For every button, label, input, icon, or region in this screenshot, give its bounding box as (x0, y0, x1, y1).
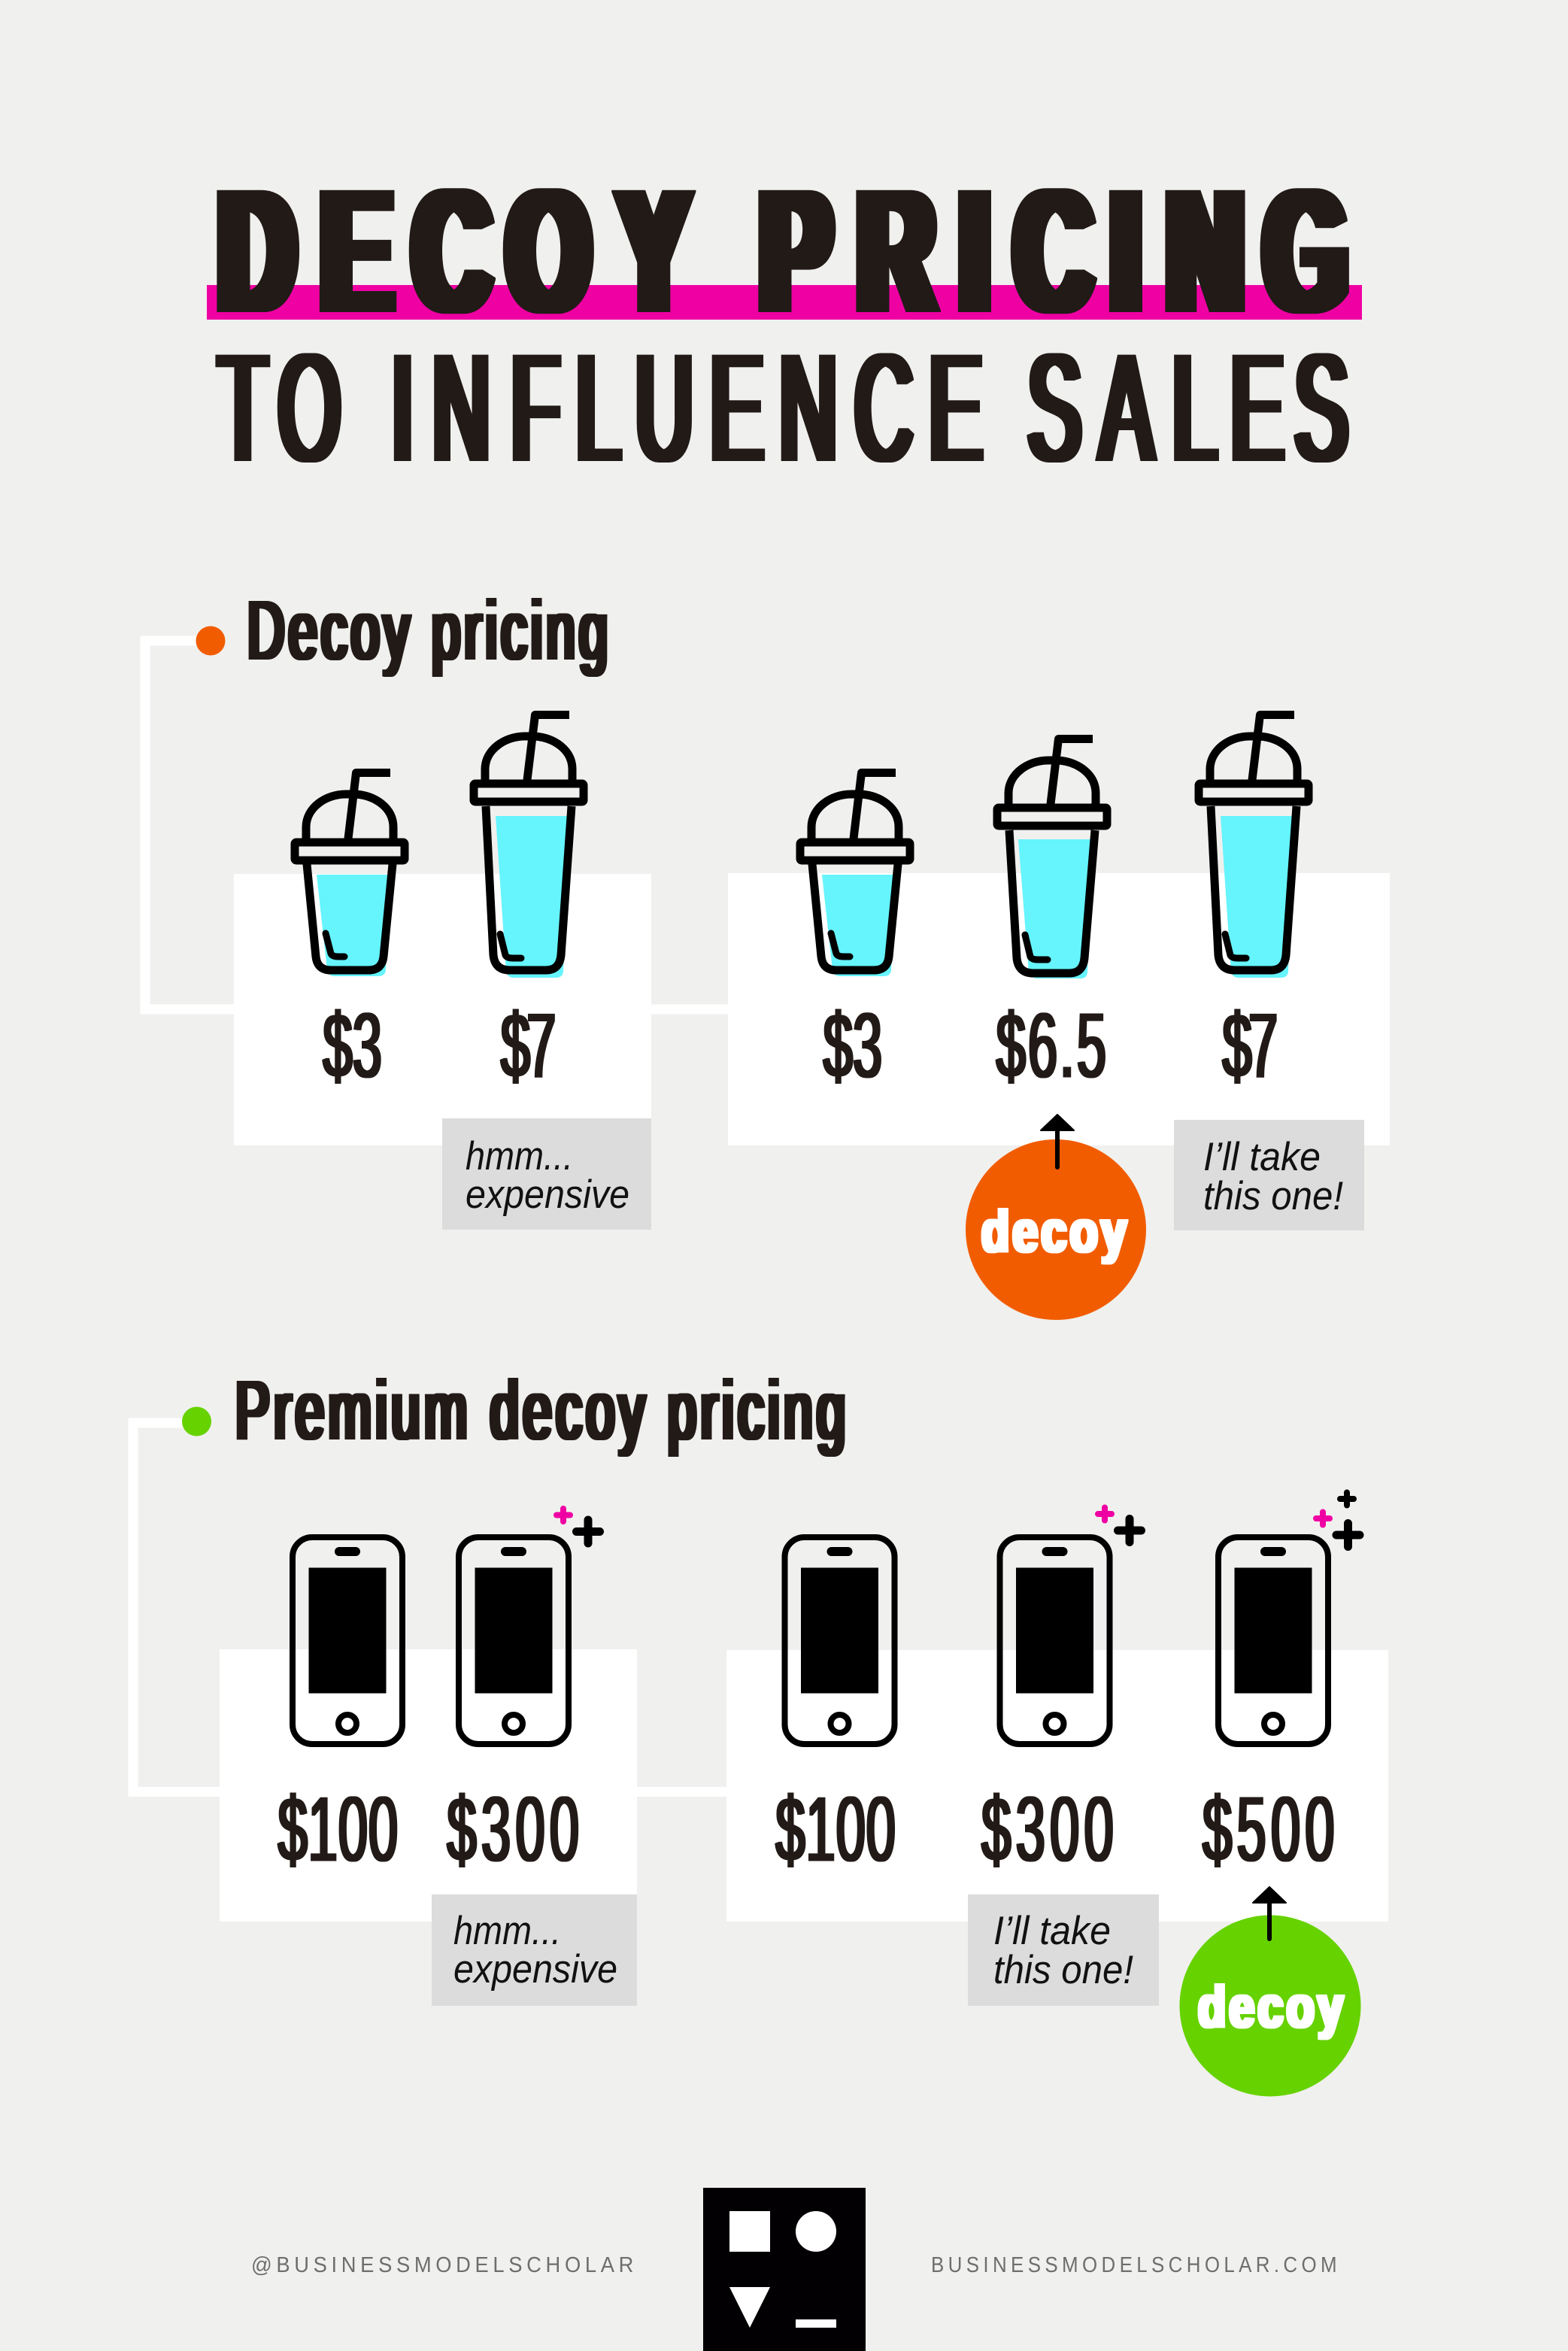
arrow: decoy to $6.5 (1041, 1115, 1074, 1167)
prices: section 1: $7 (1223, 995, 1278, 1097)
bullet: green dot (182, 1406, 211, 1436)
icon: phone $100 right (785, 1537, 895, 1744)
title: decoy pricing: DECOY PRICING (219, 153, 1347, 349)
title highlight bar (207, 285, 1362, 320)
callout: i'll take this one premium: I’ll take (993, 1909, 1111, 1953)
callout: i'll take this one premium: this one! (993, 1948, 1133, 1992)
prices: section 2: $500 (1203, 1779, 1334, 1881)
connector: section 2 bracket (133, 1423, 733, 1791)
bullet: orange dot (196, 626, 226, 656)
callout: hmm expensive: hmm... (466, 1134, 573, 1179)
callout: hmm expensive (442, 1118, 651, 1230)
badge: orange decoy: decoy (981, 1199, 1127, 1264)
prices: section 2 (278, 1779, 1334, 1881)
icon: phone $300 right (1000, 1537, 1110, 1744)
callout: hmm expensive: expensive (466, 1172, 629, 1217)
icon: large cup $7 right (1199, 714, 1309, 978)
icon: plus signs on right $300 phone (1098, 1507, 1142, 1542)
prices: section 1 (323, 995, 1278, 1097)
icon: plus signs on left $300 phone (557, 1509, 600, 1543)
heading: decoy pricing: Decoy pricing (247, 584, 608, 677)
icon: plus signs on $500 phone (1316, 1492, 1360, 1546)
icon: phone $300 (459, 1537, 569, 1744)
icon: large cup $7 (474, 714, 584, 978)
icon: small cup $3 right (800, 773, 910, 976)
prices: section 2: $300 (447, 1779, 579, 1881)
icon: phone $500 (1218, 1537, 1328, 1744)
panel: premium three options (726, 1650, 1388, 1922)
callout: i'll take this one (1174, 1120, 1364, 1230)
callout: i'll take this one premium (968, 1894, 1159, 2006)
prices: section 2: $300 (981, 1779, 1114, 1881)
logo (703, 2188, 866, 2351)
prices: section 1: $6.5 (996, 995, 1106, 1097)
footer handle: @BUSINESSMODELSCHOLAR (251, 2253, 638, 2277)
icon: small cup $3 (295, 773, 405, 976)
prices: section 1: $7 (501, 995, 556, 1097)
heading: premium decoy pricing: Premium decoy pricing (235, 1364, 845, 1457)
icon: phone $100 (293, 1537, 402, 1744)
callout: hmm expensive premium (432, 1894, 637, 2006)
prices: section 1: $3 (823, 995, 882, 1097)
prices: section 2: $100 (278, 1779, 398, 1881)
arrow: decoy to $500 (1253, 1887, 1286, 1939)
panel: decoy pricing two options (234, 874, 651, 1145)
callout: hmm expensive premium: expensive (453, 1947, 617, 1992)
prices: section 1: $3 (323, 995, 382, 1097)
connector: section 1 bracket (145, 641, 733, 1009)
prices: section 2: $100 (776, 1779, 896, 1881)
panel: premium two options (220, 1649, 637, 1922)
callout: i'll take this one: this one! (1203, 1174, 1343, 1218)
callout: i'll take this one: I’ll take (1203, 1135, 1321, 1179)
badge: orange decoy (966, 1139, 1146, 1320)
badge: green decoy (1179, 1915, 1361, 2097)
badge: green decoy: decoy (1198, 1974, 1343, 2040)
footer website: BUSINESSMODELSCHOLAR.COM (931, 2253, 1341, 2277)
subtitle: to influence sales: TO INFLUENCE SALES (219, 323, 1348, 493)
callout: hmm expensive premium: hmm... (453, 1909, 561, 1953)
icon: medium cup $6.5 (997, 739, 1107, 978)
panel: decoy pricing three options (728, 873, 1390, 1145)
